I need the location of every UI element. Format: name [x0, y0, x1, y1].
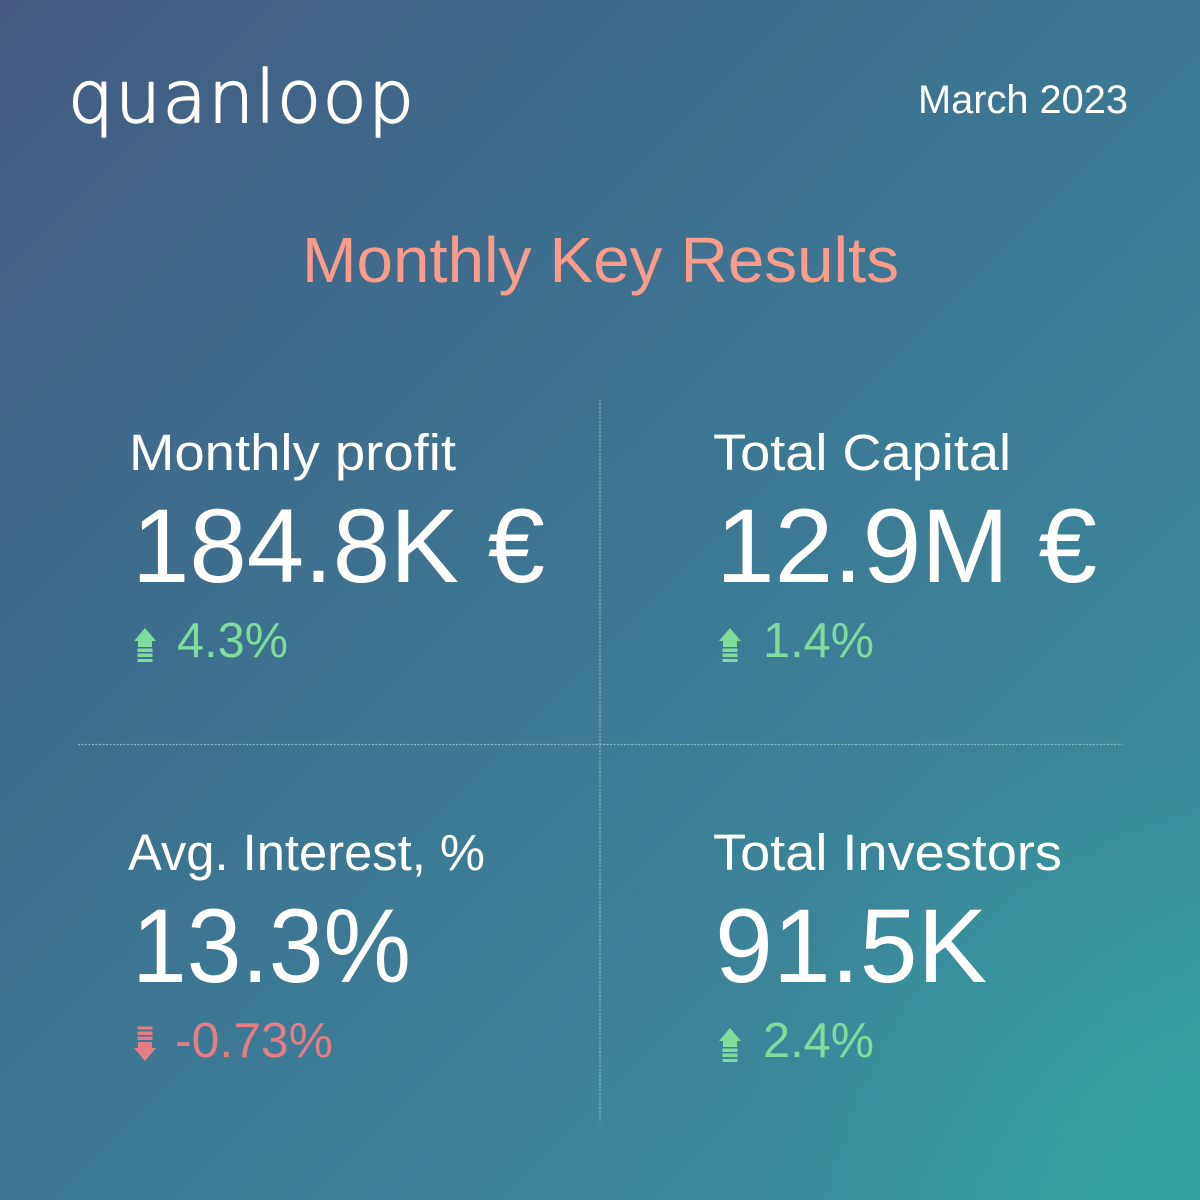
label: avg interest: Avg. Interest, % — [128, 824, 485, 881]
value: avg interest: 13.3% — [132, 888, 411, 1005]
logo: quanloop: quanloop — [68, 55, 414, 139]
change: 2.4%: 2.4% — [763, 1014, 874, 1068]
icon: up arrow — [719, 1028, 741, 1062]
change: 1.4%: 1.4% — [763, 614, 874, 668]
icon: up arrow — [134, 628, 156, 662]
panel: total investors — [713, 824, 1062, 1068]
panel: avg interest — [128, 824, 485, 1068]
value: total investors: 91.5K — [715, 888, 987, 1005]
label: total capital: Total Capital — [713, 424, 1011, 481]
vertical divider — [599, 400, 601, 1122]
label: total investors: Total Investors — [713, 824, 1062, 881]
change: -0.73%: -0.73% — [175, 1014, 333, 1068]
icon: down arrow — [134, 1026, 156, 1061]
icon: up arrow — [719, 628, 741, 662]
horizontal divider — [78, 744, 1122, 746]
value: monthly profit: 184.8K € — [132, 488, 545, 605]
value: total capital: 12.9M € — [716, 488, 1097, 605]
panel: monthly profit — [129, 424, 545, 668]
panel: total capital — [713, 424, 1097, 668]
date: March 2023 — [918, 78, 1128, 122]
change: 4.3%: 4.3% — [177, 614, 288, 668]
label: monthly profit: Monthly profit — [129, 424, 456, 481]
title: Monthly Key Results — [302, 224, 899, 296]
